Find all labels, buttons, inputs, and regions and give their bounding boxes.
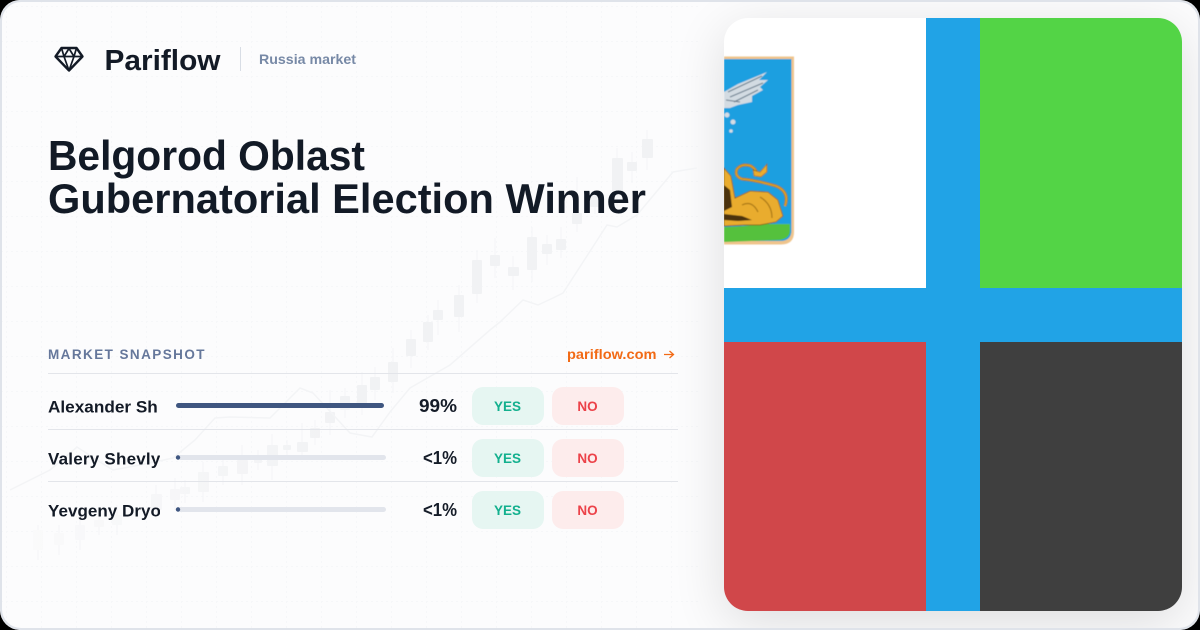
icon: diamond logo [56, 48, 82, 70]
percentage: <1% [423, 500, 457, 520]
title: Gubernatorial Election Winner [48, 175, 646, 222]
market label: Russia market [259, 51, 356, 67]
flag blue cross [724, 18, 1182, 611]
no button: NO [577, 399, 598, 414]
icon: coat of arms [724, 56, 794, 244]
link: pariflow.com: pariflow.com [567, 346, 656, 362]
row: Yevgeny Dryomov [48, 491, 624, 529]
yes button: YES [494, 503, 521, 518]
percentage: <1% [423, 448, 457, 468]
header divider [240, 47, 241, 71]
no button [552, 387, 624, 425]
no button [552, 491, 624, 529]
probability bar [176, 507, 386, 512]
percentage: 99% [419, 396, 457, 416]
yes button: YES [494, 451, 521, 466]
flag dark quarter [980, 342, 1182, 611]
probability bar [176, 455, 386, 460]
probability bar [176, 403, 384, 408]
candidate name: Valery Shevlyakov [48, 450, 201, 468]
background candlestick chart [33, 130, 653, 560]
flag red quarter [724, 342, 926, 611]
flag green quarter [980, 18, 1182, 288]
candidate name: Yevgeny Dryomov [48, 502, 197, 520]
yes button [472, 491, 544, 529]
title [48, 132, 646, 222]
row: Valery Shevlyakov [48, 439, 624, 477]
title: Belgorod Oblast [48, 132, 365, 179]
row: Alexander Shuvaev [48, 387, 624, 425]
no button: NO [577, 503, 598, 518]
yes button [472, 439, 544, 477]
flag white quarter [724, 18, 926, 288]
section heading: market snapshot: MARKET SNAPSHOT [48, 347, 205, 362]
snapshot divider lines [48, 373, 678, 482]
background trend line [10, 168, 697, 490]
no button [552, 439, 624, 477]
candidate name: Alexander Shuvaev [48, 398, 207, 416]
yes button: YES [494, 399, 521, 414]
brand name: Pariflow [104, 45, 221, 77]
no button: NO [577, 451, 598, 466]
yes button [472, 387, 544, 425]
panel: flag of Belgorod Oblast [724, 18, 1182, 611]
